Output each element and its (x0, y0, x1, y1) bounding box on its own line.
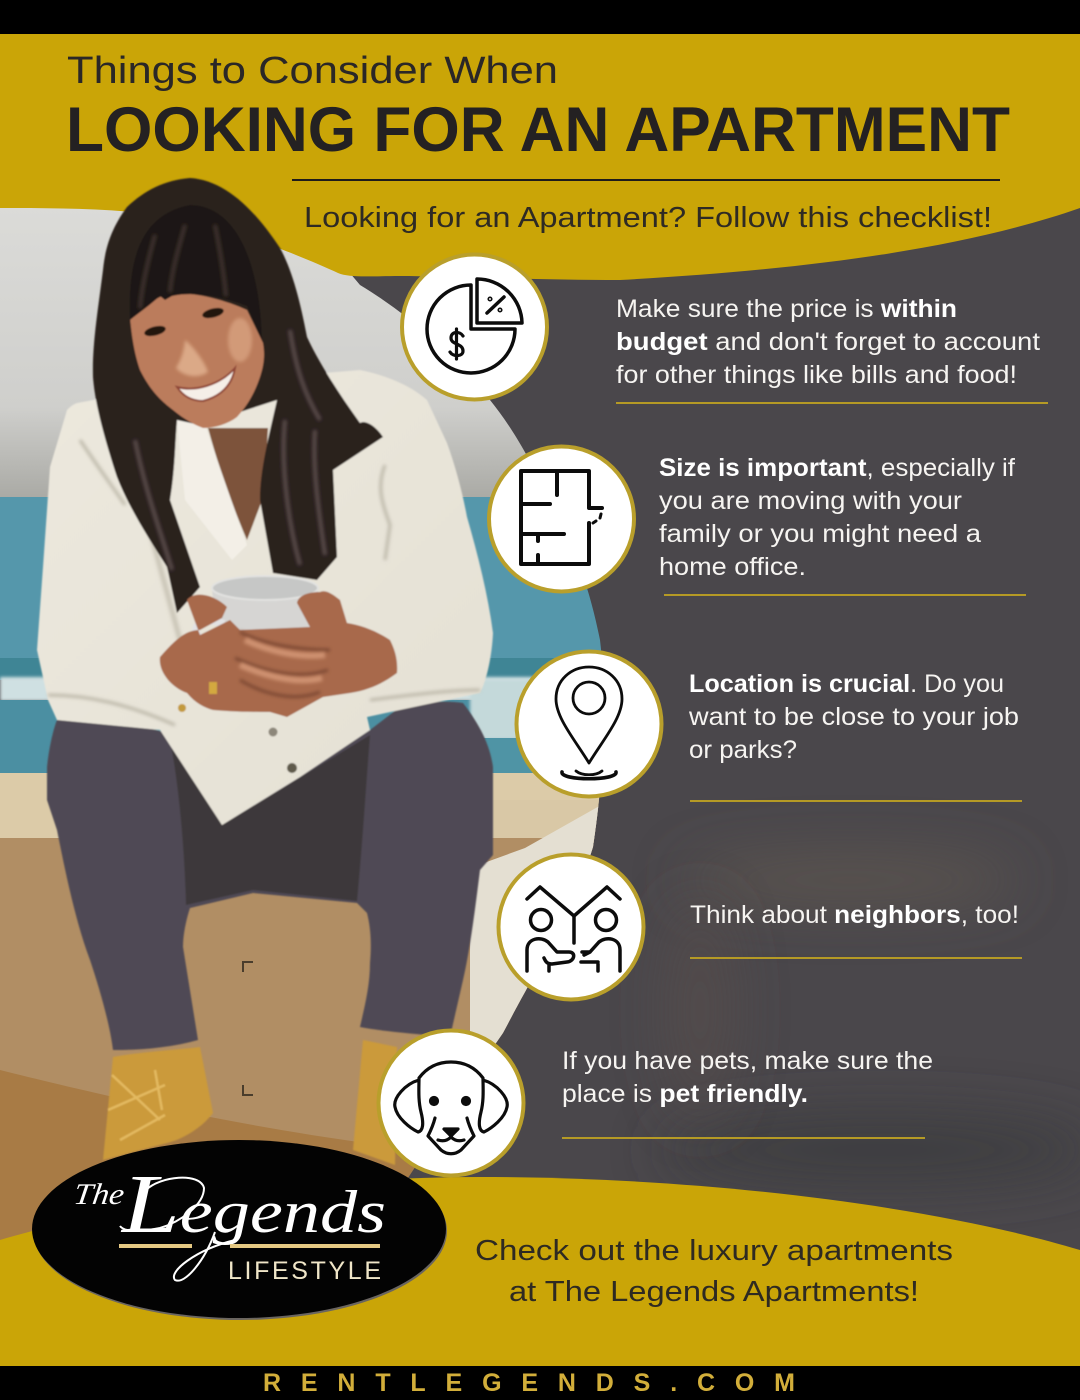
text: size: family or you might need a (659, 520, 981, 548)
smile (177, 368, 235, 401)
title (66, 50, 1010, 165)
title: Things to Consider When (67, 50, 558, 92)
text: pets: place is pet friendly. (562, 1080, 808, 1108)
call to action: at The Legends Apartments! (509, 1276, 919, 1308)
boots (103, 1040, 397, 1165)
text: neighbors: Think about neighbors, too! (690, 901, 1019, 929)
text: pets: If you have pets, make sure the (562, 1047, 933, 1075)
icon circle: neighbors (498, 854, 644, 1000)
top gold banner (0, 34, 1080, 280)
icon circle: budget (402, 254, 547, 400)
logo: The Legends Lifestyle (32, 1140, 447, 1320)
neckline (208, 428, 268, 540)
fringe strands (140, 225, 226, 308)
text: size: you are moving with your (659, 487, 962, 515)
icon circle: floor plan (489, 446, 634, 592)
text: budget: Make sure the price is within (616, 295, 957, 323)
icon: dog face (395, 1062, 507, 1154)
text: budget: budget and don't forget to account (616, 328, 1040, 356)
footer bar with website (0, 1366, 1080, 1400)
icon: two neighbours and houses (527, 887, 620, 971)
photo background: room with sofa and boxes (0, 190, 620, 1270)
photo: smiling woman holding a mug, seated on a box (37, 178, 493, 1165)
text: location: Location is crucial. Do you (689, 670, 1004, 698)
ring and buttons (178, 682, 297, 773)
hand highlights (235, 632, 330, 697)
shirt (37, 370, 493, 825)
top black bar (0, 0, 1080, 34)
eyes (143, 306, 225, 338)
trouser shadow (170, 735, 370, 905)
hair (93, 178, 383, 613)
trousers (47, 702, 493, 1050)
face (130, 293, 264, 428)
icon: floor plan (521, 471, 602, 564)
hands (160, 591, 397, 717)
icon circle: location (516, 652, 662, 796)
logo: The Legends Lifestyle: LIFESTYLE (228, 1257, 381, 1285)
logo: The Legends Lifestyle: Legends (121, 1158, 386, 1251)
call to action: Check out the luxury apartments (475, 1235, 953, 1267)
hair highlights (135, 330, 325, 570)
icon circle: pets (378, 1030, 524, 1176)
text: budget: for other things like bills and food! (616, 361, 1017, 389)
face highlights (176, 318, 252, 376)
subtitle: Looking for an Apartment? Follow this checklist! (304, 202, 992, 234)
text: pets (562, 1047, 933, 1108)
footer bar with website: RENTLEGENDS.COM (263, 1369, 795, 1397)
icon: pie chart with dollar and percent (427, 279, 522, 373)
text: size: home office. (659, 553, 806, 581)
title: LOOKING FOR AN APARTMENT (66, 95, 1010, 165)
mug (196, 576, 318, 640)
text: location (688, 670, 1019, 764)
text: location: want to be close to your job (688, 703, 1019, 731)
bottom gold banner (0, 1177, 1080, 1366)
call to action (475, 1235, 953, 1308)
text: size (659, 454, 1015, 581)
text: size: Size is important , especially if (659, 454, 1015, 482)
fringe (130, 205, 262, 340)
text: location: or parks? (689, 736, 797, 764)
text: budget (616, 295, 1040, 389)
icon: map pin (556, 667, 622, 779)
logo: The Legends Lifestyle: The (72, 1177, 127, 1211)
